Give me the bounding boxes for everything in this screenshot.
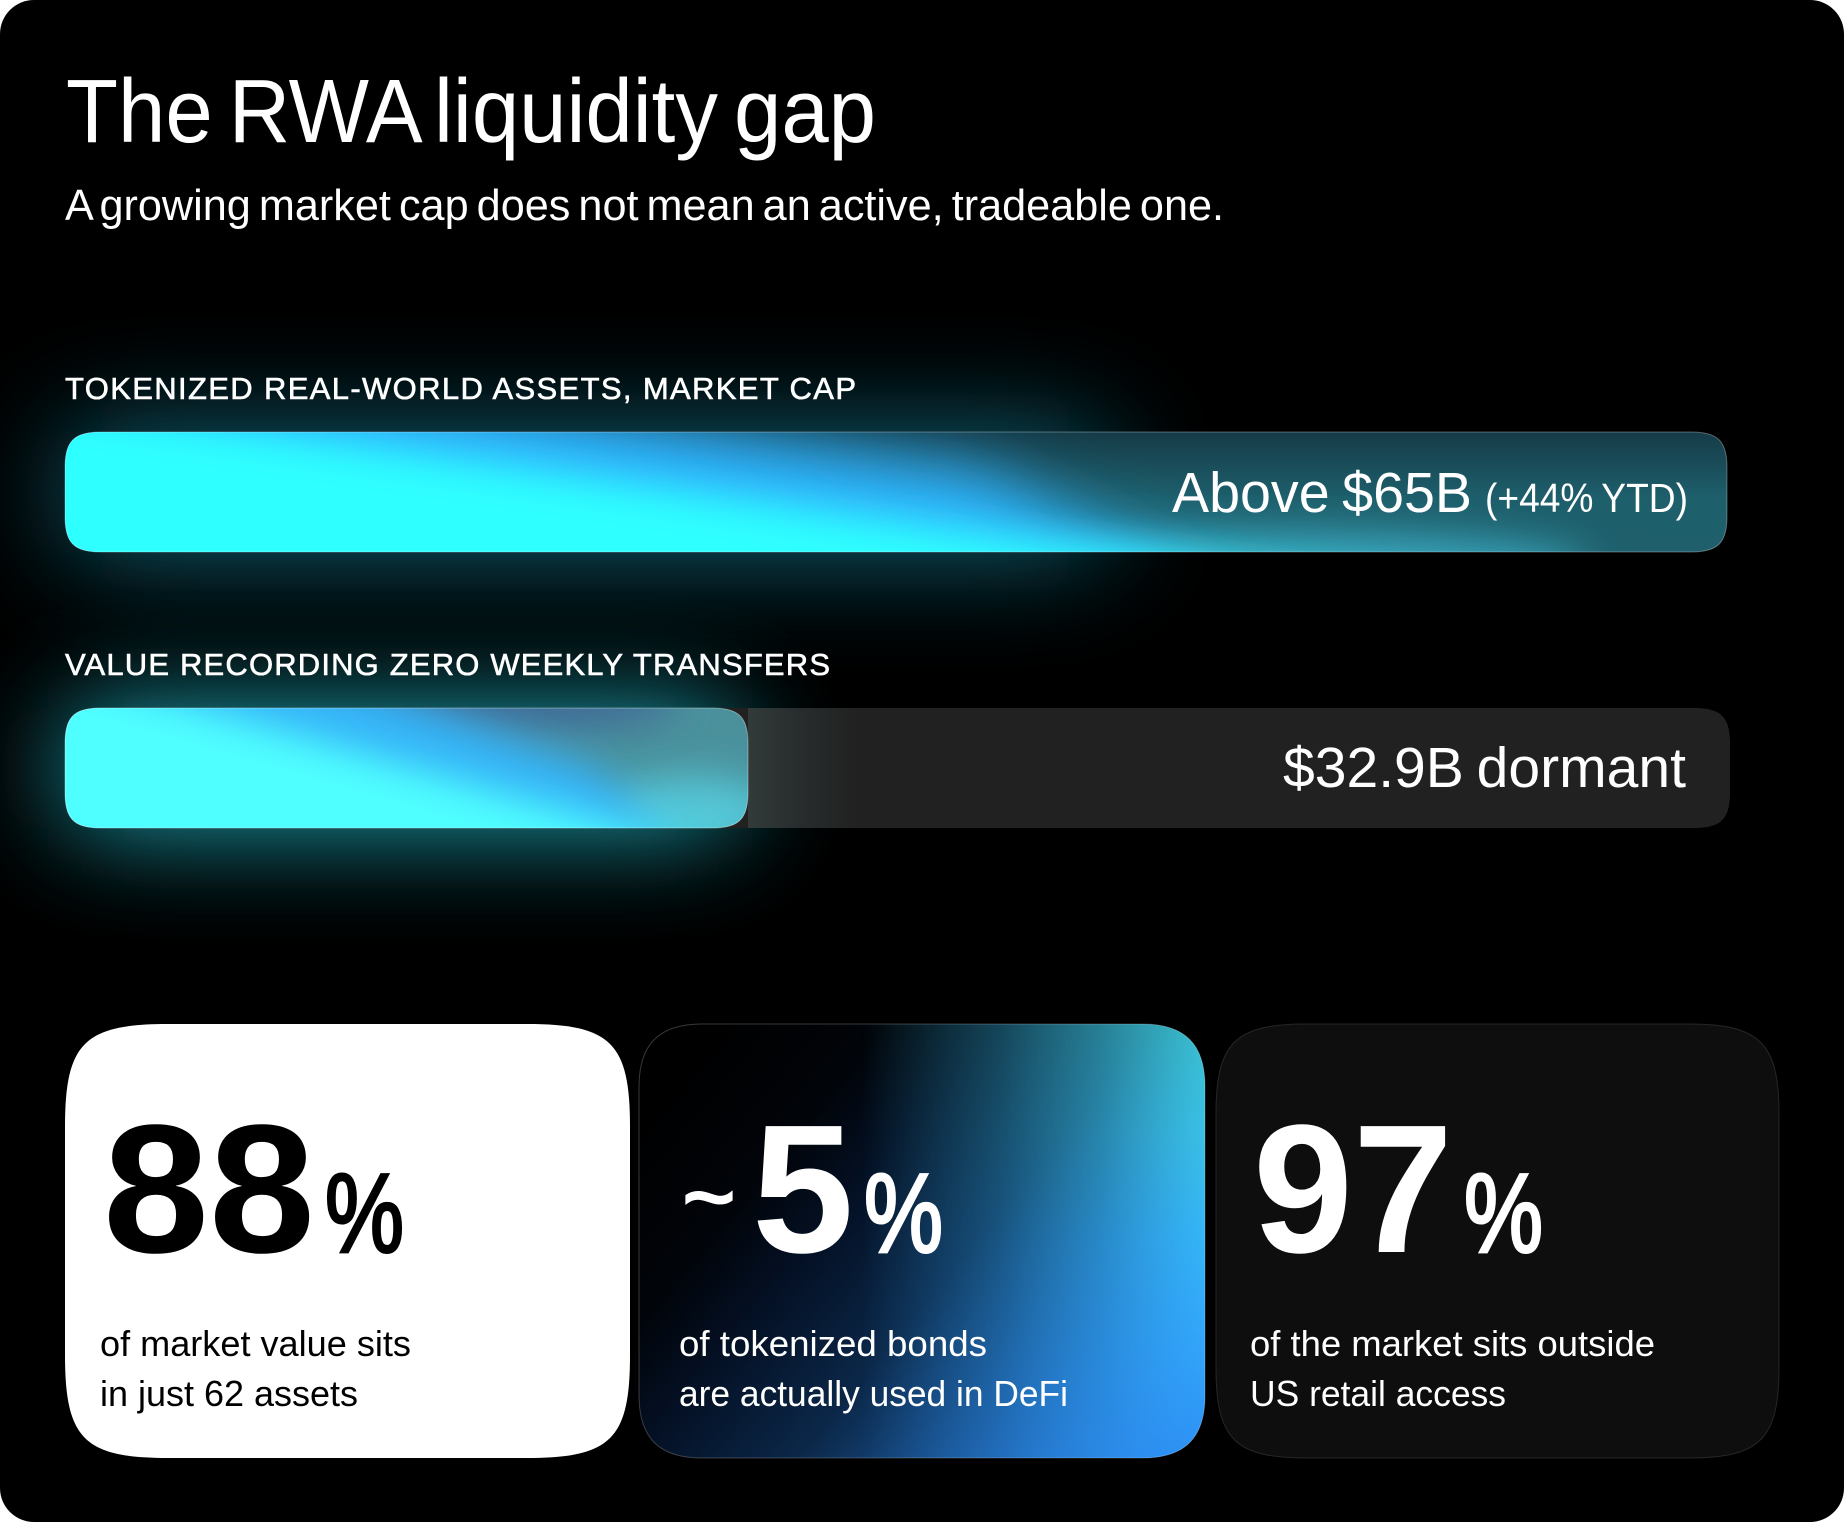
card: 97% <box>1216 1024 1779 1458</box>
stat: 88% <box>103 1086 404 1291</box>
value: above $65B: (+44% YTD) <box>1485 475 1688 521</box>
stat: ~5%: % <box>864 1151 943 1276</box>
caption: of the market sits outside <box>1250 1323 1655 1364</box>
caption <box>100 1323 411 1414</box>
caption: of market value sits <box>100 1323 411 1364</box>
caption: are actually used in DeFi <box>679 1373 1068 1414</box>
caption <box>679 1323 1068 1414</box>
caption: of tokenized bonds <box>679 1323 987 1364</box>
caption <box>1250 1323 1655 1414</box>
stat: ~5%: 5 <box>752 1086 854 1291</box>
card: 88% <box>65 1024 630 1458</box>
bar track: dormant <box>719 708 1730 828</box>
label: market cap: TOKENIZED REAL-WORLD ASSETS, MARKET CAP <box>65 371 856 406</box>
value: $32.9B dormant: $32.9B dormant <box>1283 736 1686 800</box>
bar fill: dormant <box>64 708 748 828</box>
caption: US retail access <box>1250 1373 1506 1414</box>
stat: ~5%: ~ <box>683 1150 735 1244</box>
bar: market cap <box>64 432 1728 552</box>
glow behind market cap bar <box>65 432 1105 552</box>
stat: ~5% <box>683 1086 943 1291</box>
glow behind dormant bar <box>65 708 735 828</box>
stat: 97%: % <box>1464 1151 1543 1276</box>
card: ~5% <box>639 1024 1205 1458</box>
value: above $65B <box>1172 461 1688 525</box>
subtitle: A growing market cap does not mean an active, tradeable one. <box>65 181 1224 230</box>
stat: 97%: 97 <box>1253 1086 1453 1291</box>
title: The RWA liquidity gap <box>66 62 876 162</box>
caption: in just 62 assets <box>100 1373 358 1414</box>
label: zero weekly transfers: VALUE RECORDING ZERO WEEKLY TRANSFERS <box>65 647 830 682</box>
value: above $65B: Above $65B <box>1172 461 1472 525</box>
stat: 88%: % <box>325 1151 404 1276</box>
stat: 88%: 88 <box>103 1086 315 1291</box>
